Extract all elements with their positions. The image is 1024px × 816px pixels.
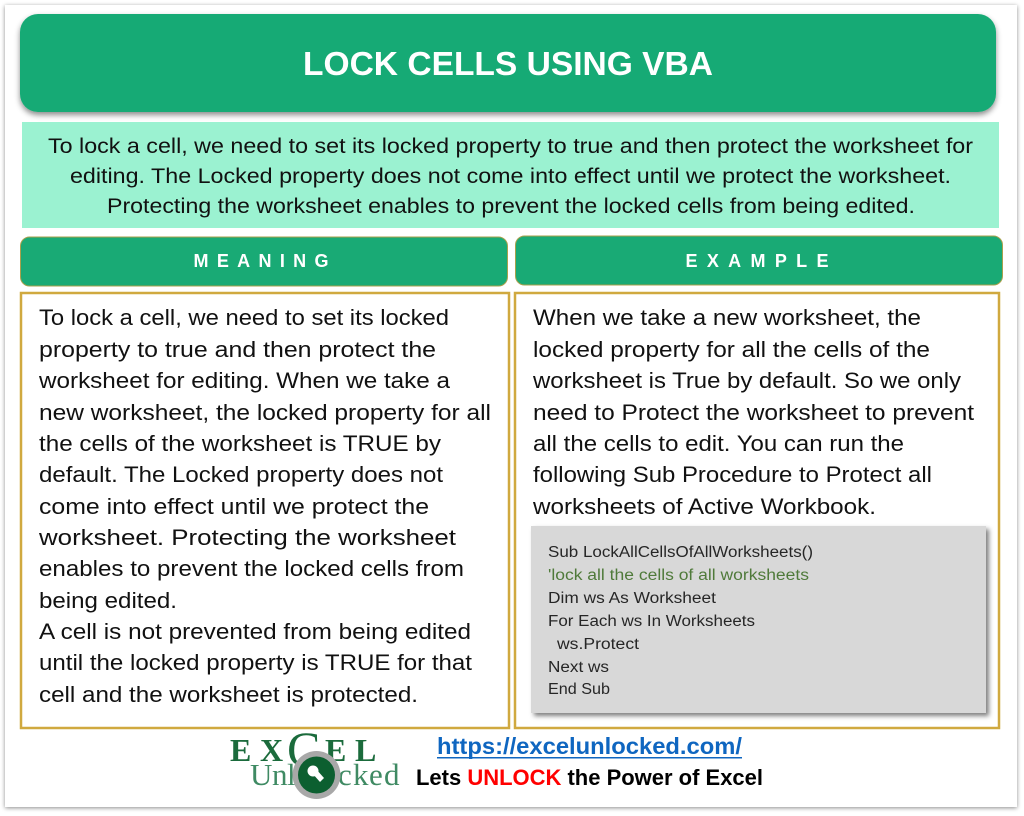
heading: example xyxy=(516,236,1002,285)
website link: https://excelunlocked.com/ xyxy=(437,733,743,759)
code box: 'lock all the cells of all worksheets xyxy=(548,567,809,584)
panel: meaning: the cells of the worksheet is TRUE by xyxy=(39,431,442,456)
intro text panel xyxy=(22,122,999,228)
panel: meaning: cell and the worksheet is protected. xyxy=(39,682,418,707)
panel: meaning: being edited. xyxy=(39,588,177,613)
logo: Excel Unlocked: Unlocked xyxy=(250,757,400,792)
heading: meaning xyxy=(20,237,508,286)
code box xyxy=(531,526,986,713)
panel: meaning: worksheet. Protecting the worksheet xyxy=(38,525,457,550)
panel: meaning: worksheet for editing. When we take a xyxy=(38,368,451,393)
panel: meaning: enables to prevent the locked cells from xyxy=(39,556,464,581)
panel: meaning: until the locked property is TRUE for that xyxy=(39,650,473,675)
heading: meaning: MEANING xyxy=(194,251,328,271)
code box: Dim ws As Worksheet xyxy=(548,590,717,607)
panel: example: worksheets of Active Workbook. xyxy=(532,494,876,519)
panel: meaning xyxy=(21,293,509,728)
panel: example xyxy=(515,293,999,728)
panel: meaning: default. The Locked property does not xyxy=(39,462,444,487)
logo: Excel Unlocked: C xyxy=(287,721,320,777)
title banner xyxy=(20,14,996,112)
intro text panel: Protecting the worksheet enables to prevent the locked cells from being edited. xyxy=(107,194,915,218)
intro text panel: editing. The Locked property does not come into effect until we protect the worksheet. xyxy=(70,164,951,188)
code box: End Sub xyxy=(548,681,610,698)
tagline: Lets UNLOCK the Power of Excel xyxy=(416,765,763,790)
logo: Excel Unlocked xyxy=(230,721,400,799)
panel: example: locked property for all the cells of the xyxy=(533,337,930,362)
code box: For Each ws In Worksheets xyxy=(548,613,755,630)
icon: padlock xyxy=(292,751,340,799)
panel: meaning: come into effect until we protect the xyxy=(39,494,429,519)
panel: meaning: To lock a cell, we need to set its locked xyxy=(39,305,449,330)
panel: meaning: new worksheet, the locked property for all xyxy=(39,400,491,425)
intro text panel: To lock a cell, we need to set its locked property to true and then protect the worksheet for xyxy=(48,134,973,158)
code box: ws.Protect xyxy=(556,636,640,653)
panel: example: following Sub Procedure to Protect all xyxy=(533,462,932,487)
title banner: LOCK CELLS USING VBA xyxy=(303,45,713,82)
panel: example: need to Protect the worksheet to prevent xyxy=(533,400,975,425)
panel: meaning: property to true and then protect the xyxy=(39,337,436,362)
code box: Next ws xyxy=(548,659,609,676)
logo: Excel Unlocked: EX xyxy=(230,732,283,768)
panel: example: When we take a new worksheet, the xyxy=(533,305,921,330)
panel: example: all the cells to edit. You can run the xyxy=(533,431,904,456)
heading: example: EXAMPLE xyxy=(686,251,828,271)
panel: example: worksheet is True by default. So we only xyxy=(532,368,962,393)
logo: Excel Unlocked: EL xyxy=(325,732,376,768)
code box: Sub LockAllCellsOfAllWorksheets() xyxy=(548,544,813,561)
panel: meaning: A cell is not prevented from being edited xyxy=(39,619,471,644)
